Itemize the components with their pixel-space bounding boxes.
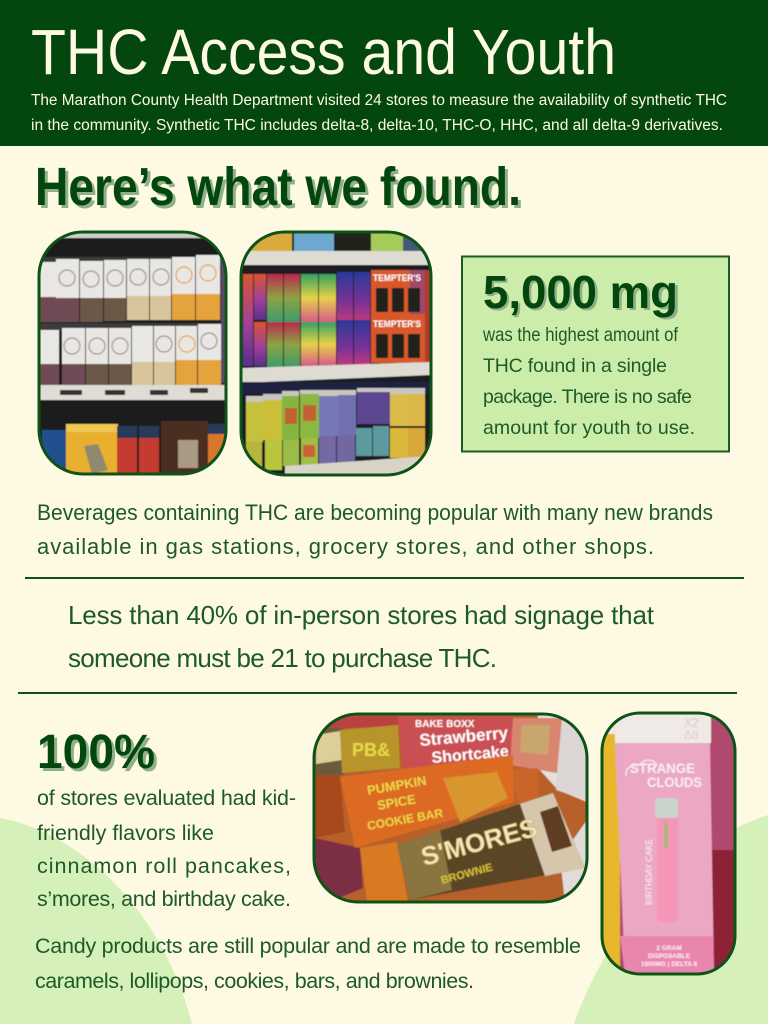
photo: pink vape package: CLOUDS (647, 775, 702, 790)
text: signage finding (68, 600, 655, 673)
callout text: was the highest amount of (482, 324, 678, 346)
callout text: amount for youth to use. (483, 417, 695, 439)
photo: pink vape package: 1800MG | DELTA 8 (641, 961, 698, 968)
callout text (482, 324, 695, 439)
photo: THC baked goods packages: SPICE (376, 791, 417, 813)
callout: 5,000 mg (462, 256, 729, 452)
text: signage finding: Less than 40% of in-person stores had signage that (68, 600, 655, 630)
photo: pink vape package (602, 713, 735, 974)
photo: THC baked goods packages: COOKIE BAR (366, 806, 444, 833)
text: signage finding: someone must be 21 to purchase THC. (68, 643, 497, 673)
photo: THC baked goods packages (314, 714, 587, 902)
photo: looner beverage cans on shelf (39, 232, 226, 474)
section heading: Here’s what we found. (35, 157, 521, 217)
text: candy products: Candy products are still popular and are made to resemble (35, 934, 581, 958)
header band (0, 0, 768, 146)
callout text: package. There is no safe (483, 386, 692, 408)
header description: The Marathon County Health Department visited 24 stores to measure the availability of synthetic THC (31, 92, 727, 109)
text: candy products (35, 934, 581, 993)
photo: colorful THC beverage cans on shelf: TEMPTER'S (373, 273, 421, 284)
decorative blob: bottom left (0, 818, 192, 1024)
header description: in the community. Synthetic THC includes delta-8, delta-10, THC-O, HHC, and all delta-9 derivatives. (31, 117, 723, 134)
photo: colorful THC beverage cans on shelf (241, 232, 431, 475)
text: kid-friendly flavors: of stores evaluated had kid- (37, 786, 296, 810)
callout number: 5,000 mg (485, 268, 681, 320)
callout text: THC found in a single (483, 355, 667, 377)
text: beverages: available in gas stations, grocery stores, and other shops. (37, 534, 654, 559)
photo: THC baked goods packages: PUMPKIN (366, 773, 428, 798)
photo: THC baked goods packages: PB& (352, 740, 390, 760)
text: kid-friendly flavors (37, 786, 296, 911)
header description (31, 92, 727, 134)
text: beverages: Beverages containing THC are becoming popular with many new brands (37, 500, 713, 525)
photo: THC baked goods packages: S'MORES (418, 812, 540, 872)
photo: THC baked goods packages: Strawberry (419, 723, 509, 750)
callout number: 5,000 mg (483, 266, 678, 318)
photo: pink vape package: Δ8 (684, 728, 699, 742)
photo: colorful THC beverage cans on shelf: TEMPTER'S (373, 319, 421, 330)
text: kid-friendly flavors: cinnamon roll pancakes, (37, 854, 291, 878)
text: kid-friendly flavors: friendly flavors like (37, 821, 214, 845)
photo: THC baked goods packages: Shortcake (431, 743, 510, 767)
photo: pink vape package: STRANGE (630, 761, 695, 776)
photo: pink vape package: BIRTHDAY CAKE (644, 839, 654, 905)
photo: pink vape package: 2 GRAM (656, 945, 682, 952)
title: THC Access and Youth (31, 16, 616, 88)
decorative blob: bottom right (574, 815, 768, 1024)
photo: THC baked goods packages: BAKE BOXX (415, 719, 475, 730)
section heading: Here’s what we found. (38, 160, 524, 220)
text: beverages (37, 500, 713, 559)
statistic: 100%: 100% (40, 729, 158, 782)
text: kid-friendly flavors: s’mores, and birthday cake. (37, 887, 291, 911)
statistic: 100%: 100% (37, 726, 155, 779)
photo: THC baked goods packages: BROWNIE (440, 862, 494, 887)
photo: pink vape package: X2 (684, 716, 699, 730)
text: candy products: caramels, lollipops, cookies, bars, and brownies. (35, 969, 474, 993)
photo: pink vape package: DISPOSABLE (648, 953, 691, 960)
